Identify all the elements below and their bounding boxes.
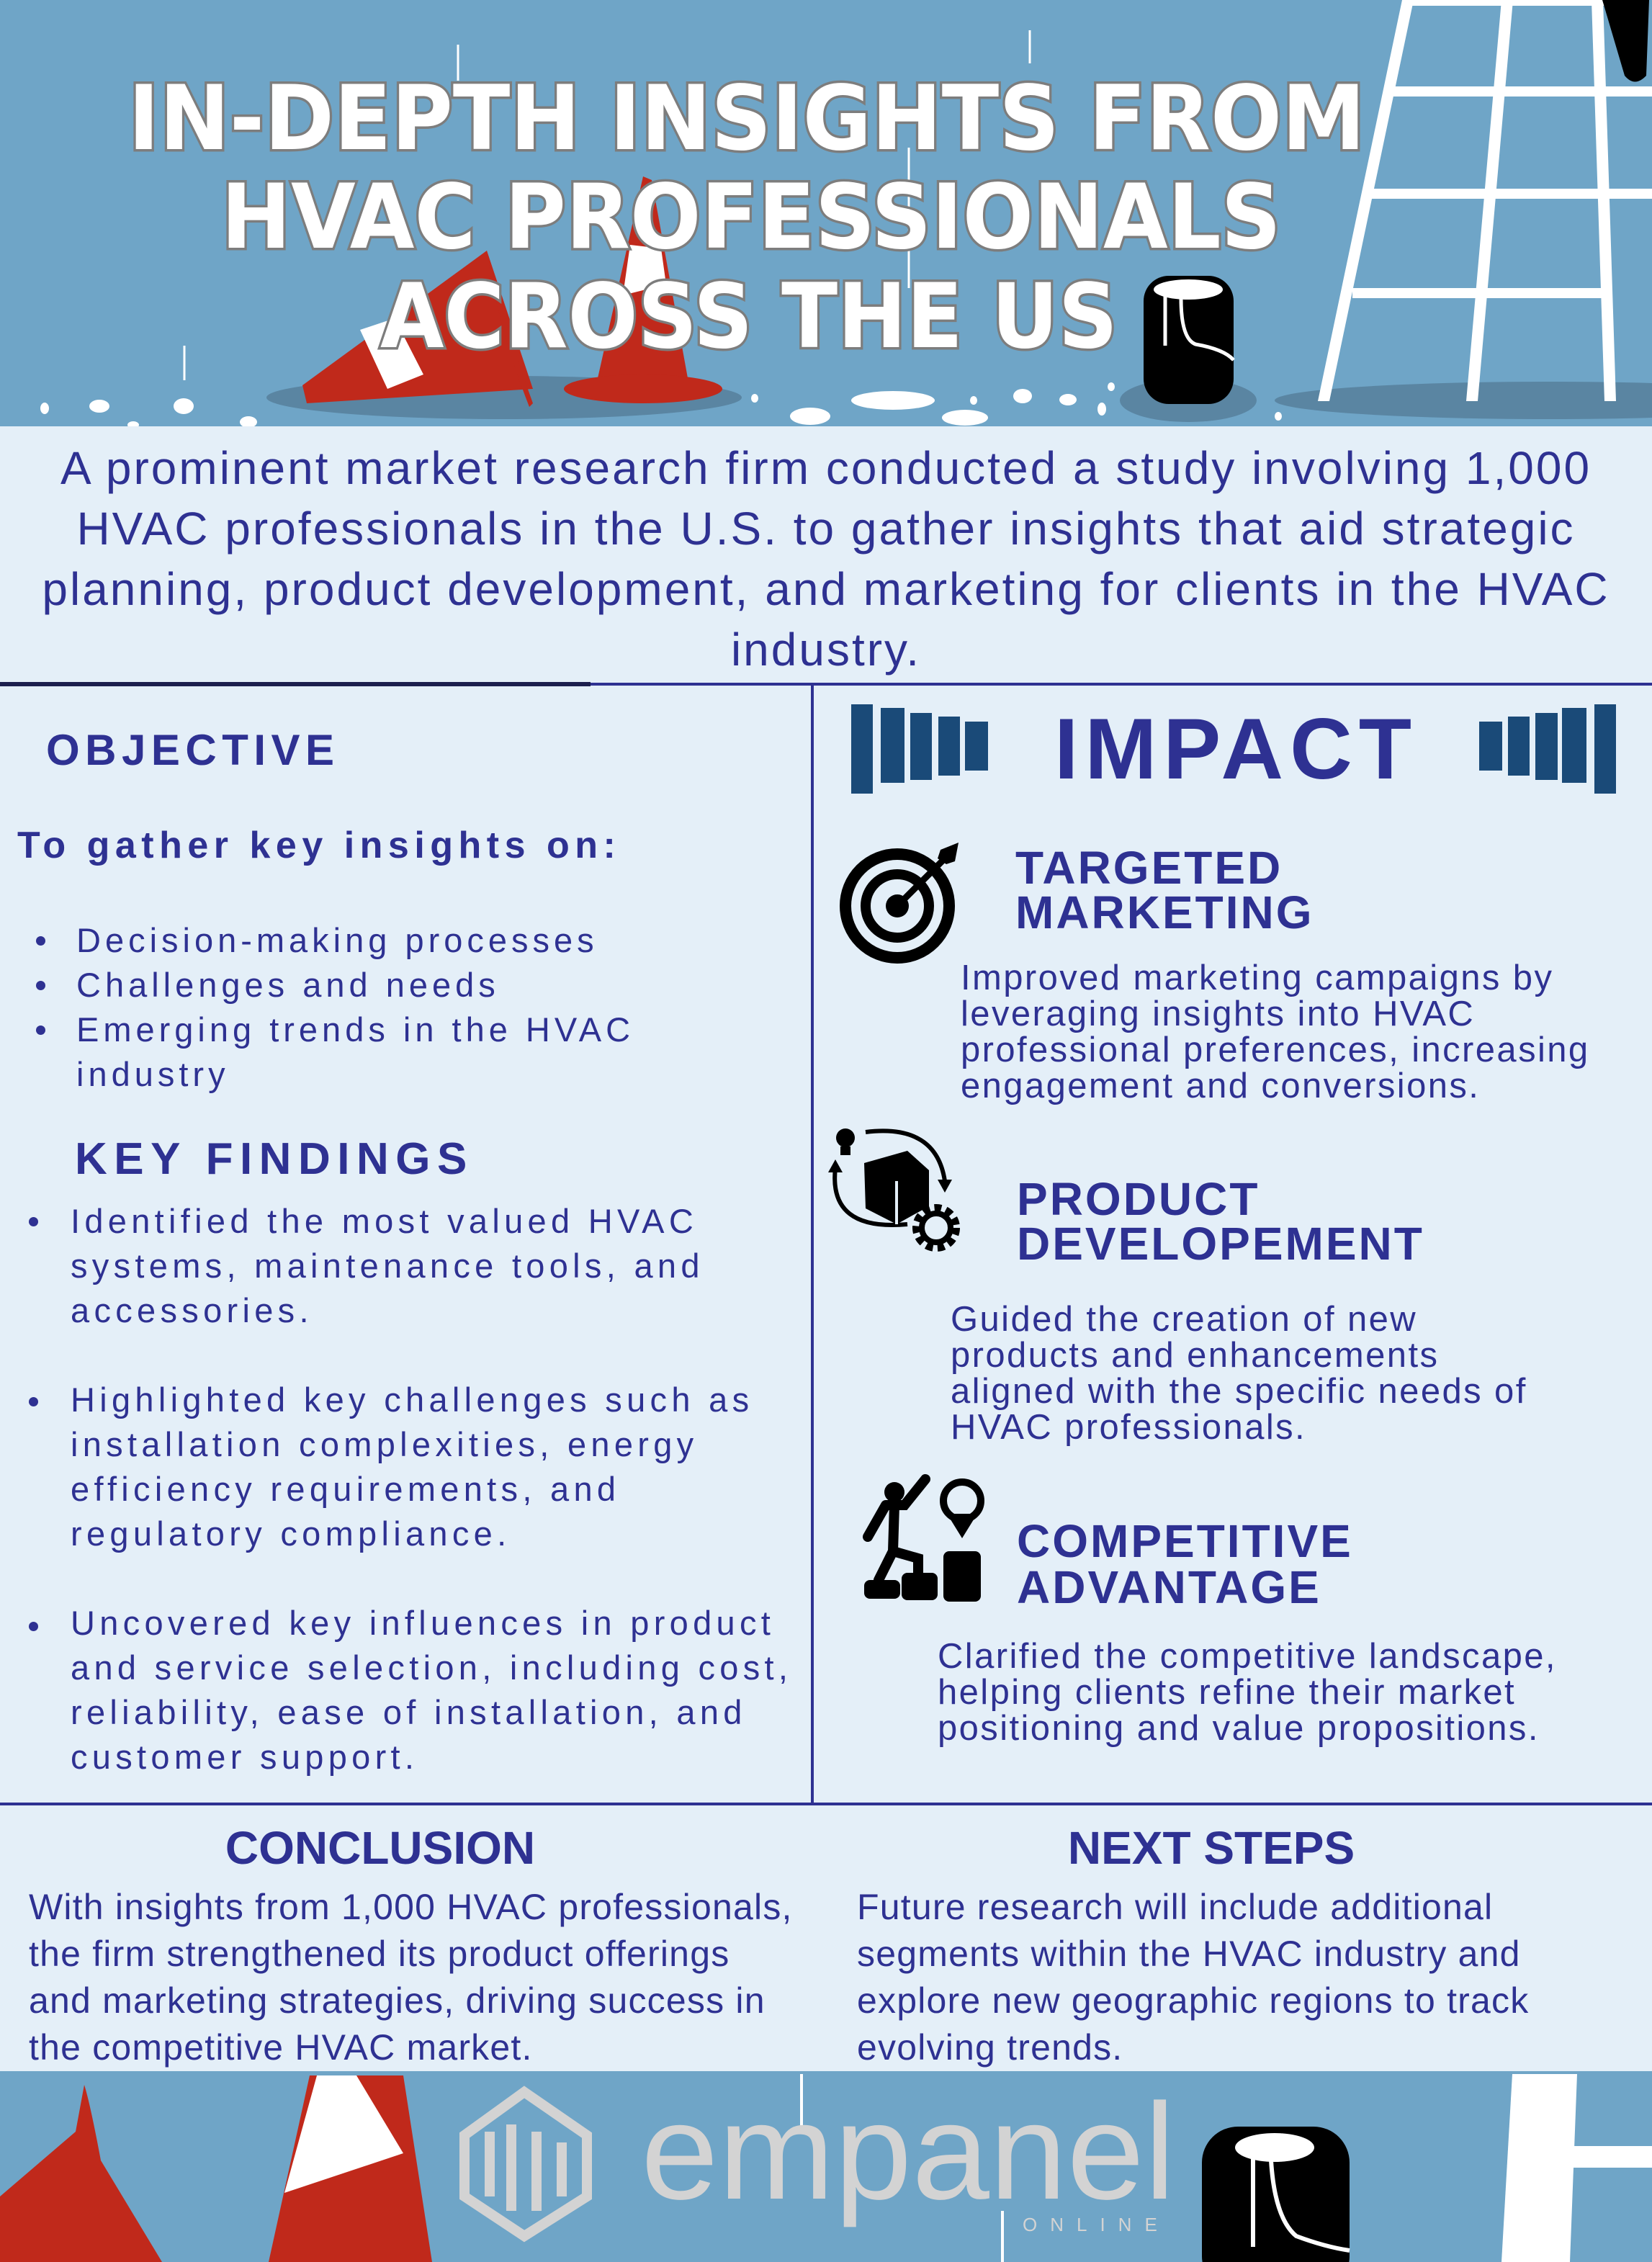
objective bullets: Challenges and needs: [76, 966, 500, 1004]
item: product development: [828, 1128, 1527, 1447]
panel: next steps: [857, 1822, 1529, 2068]
findings bullets: and service selection, including cost,: [71, 1648, 792, 1687]
findings bullets: installation complexities, energy: [71, 1425, 698, 1463]
body: positioning and value propositions.: [938, 1709, 1540, 1748]
text: explore new geographic regions to track: [857, 1980, 1529, 2021]
body: engagement and conversions.: [961, 1067, 1480, 1105]
title: PRODUCT: [1017, 1173, 1260, 1225]
text: Future research will include additional: [857, 1887, 1493, 1927]
intro text: [42, 442, 1610, 676]
findings bullets: regulatory compliance.: [71, 1514, 511, 1553]
panel: conclusion: [29, 1822, 793, 2068]
icon: target: [840, 843, 959, 964]
findings bullets: Uncovered key influences in product: [71, 1604, 775, 1642]
text: the firm strengthened its product offerings: [29, 1934, 730, 1974]
header banner: [0, 0, 1652, 426]
findings bullets: Highlighted key challenges such as: [71, 1381, 753, 1419]
icon: product cycle: [828, 1128, 960, 1252]
body: HVAC professionals.: [951, 1408, 1306, 1447]
title: [1017, 1173, 1424, 1270]
divider lines: [0, 683, 1652, 686]
title: IN-DEPTH INSIGHTS FROM: [128, 67, 1365, 171]
findings bullets: efficiency requirements, and: [71, 1470, 620, 1508]
item: competitive advantage: [863, 1474, 1557, 1748]
body: Clarified the competitive landscape,: [938, 1637, 1557, 1676]
text: the competitive HVAC market.: [29, 2027, 533, 2068]
title: DEVELOPEMENT: [1017, 1218, 1424, 1270]
paint can: [1144, 276, 1234, 404]
title: [1015, 842, 1314, 938]
text: and marketing strategies, driving success in: [29, 1980, 766, 2021]
logo: ONLINE: [1023, 2214, 1170, 2235]
cone standing: [564, 176, 722, 403]
body: [951, 1300, 1527, 1447]
ladder: [1318, 0, 1652, 401]
heading: key findings: KEY FINDINGS: [75, 1134, 474, 1184]
body: aligned with the specific needs of: [951, 1372, 1527, 1411]
intro text: planning, product development, and marketing for clients in the HVAC: [42, 563, 1610, 615]
body: helping clients refine their market: [938, 1673, 1516, 1712]
text: [857, 1887, 1529, 2068]
paint can: [1202, 2127, 1350, 2262]
body: [938, 1637, 1557, 1748]
findings bullets: [29, 1202, 792, 1776]
text: evolving trends.: [857, 2027, 1123, 2068]
body: professional preferences, increasing: [961, 1031, 1590, 1069]
logo: empanel: [641, 2075, 1175, 2228]
intro text: A prominent market research firm conducted a study involving 1,000: [60, 442, 1592, 494]
findings bullets: Identified the most valued HVAC: [71, 1202, 698, 1240]
title: ACROSS THE US: [380, 265, 1118, 369]
text: With insights from 1,000 HVAC professionals,: [29, 1887, 793, 1927]
objective bullets: [36, 921, 634, 1093]
heading: objective: OBJECTIVE: [46, 726, 340, 774]
impact heading with bars: IMPACT: [1054, 701, 1418, 797]
panel: objective: [17, 726, 792, 1776]
findings bullets: customer support.: [71, 1738, 418, 1776]
findings bullets: accessories.: [71, 1291, 313, 1329]
body: [961, 959, 1590, 1105]
intro text: industry.: [731, 624, 921, 676]
cone tilted: [302, 251, 533, 407]
body: Improved marketing campaigns by: [961, 959, 1553, 997]
objective bullets: industry: [76, 1055, 230, 1093]
intro text: HVAC professionals in the U.S. to gather insights that aid strategic: [76, 503, 1576, 555]
body: Guided the creation of new: [951, 1300, 1417, 1339]
title: HVAC PROFESSIONALS: [221, 166, 1281, 269]
icon: climber: [863, 1474, 984, 1602]
objective bullets: Emerging trends in the HVAC: [76, 1010, 634, 1049]
title: COMPETITIVE: [1017, 1515, 1353, 1567]
title: MARKETING: [1015, 887, 1314, 938]
title: TARGETED: [1015, 842, 1283, 894]
findings bullets: reliability, ease of installation, and: [71, 1693, 747, 1731]
impact heading with bars: [851, 701, 1616, 797]
body: leveraging insights into HVAC: [961, 995, 1475, 1033]
title: [1017, 1515, 1353, 1613]
panel: impact: [828, 701, 1616, 1748]
heading: NEXT STEPS: [1068, 1822, 1355, 1874]
title: [128, 67, 1365, 369]
heading: CONCLUSION: [225, 1822, 535, 1874]
findings bullets: systems, maintenance tools, and: [71, 1247, 704, 1285]
subheading: To gather key insights on:: [17, 825, 621, 866]
item: targeted marketing: [840, 842, 1590, 1105]
footer banner: [0, 2071, 1652, 2262]
objective bullets: Decision-making processes: [76, 921, 598, 959]
text: [29, 1887, 793, 2068]
title: ADVANTAGE: [1017, 1561, 1321, 1613]
text: segments within the HVAC industry and: [857, 1934, 1521, 1974]
body: products and enhancements: [951, 1336, 1439, 1375]
